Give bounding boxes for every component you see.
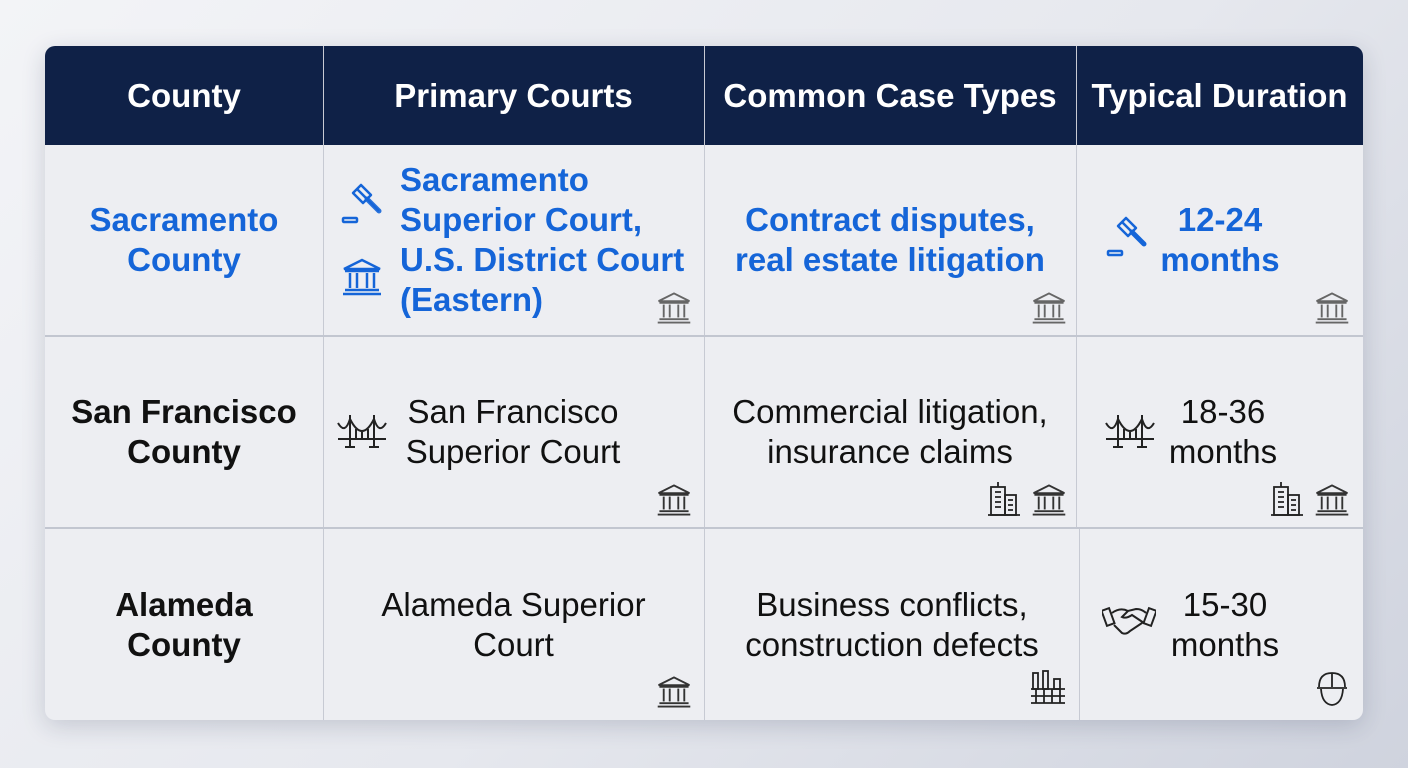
county name xyxy=(115,586,253,663)
county name: County xyxy=(127,433,241,470)
case types xyxy=(735,201,1045,278)
case types: Business conflicts, xyxy=(756,586,1028,622)
case types: Commercial litigation, xyxy=(732,393,1048,430)
duration: months xyxy=(1160,241,1280,278)
case types xyxy=(745,586,1039,662)
county name xyxy=(90,201,278,278)
icon: courthouse blue xyxy=(343,258,381,296)
duration xyxy=(1169,393,1277,470)
icon: handshake xyxy=(1102,606,1156,635)
row 2: San Francisco xyxy=(71,393,1303,516)
courts text: Superior Court xyxy=(406,433,620,470)
courts text xyxy=(406,393,620,470)
case types: insurance claims xyxy=(767,433,1013,470)
header: County: County xyxy=(127,76,241,114)
duration: months xyxy=(1169,433,1277,470)
icon: gavel blue xyxy=(342,184,382,224)
row 3: Alameda xyxy=(115,586,1347,706)
courts text: San Francisco xyxy=(408,393,618,430)
icon: bridge xyxy=(337,415,387,448)
courts text: Superior Court, xyxy=(400,201,642,238)
icon: factory xyxy=(1031,670,1065,704)
courts text xyxy=(381,586,646,662)
duration: 12-24 xyxy=(1178,201,1262,238)
header row xyxy=(45,46,1363,145)
duration xyxy=(1160,201,1280,278)
county name: Alameda xyxy=(115,586,253,622)
county name: San Francisco xyxy=(71,393,297,430)
icons: gray courthouses xyxy=(658,292,1348,708)
duration xyxy=(1171,586,1279,662)
county name: Sacramento xyxy=(90,201,278,238)
courts text: Alameda Superior xyxy=(381,586,646,622)
case types: construction defects xyxy=(745,626,1039,662)
duration: 15-30 xyxy=(1183,586,1267,622)
header: Common Case Types: Common Case Types xyxy=(723,76,1057,114)
courts text: U.S. District Court xyxy=(400,241,684,278)
case types xyxy=(732,393,1048,470)
case types: real estate litigation xyxy=(735,241,1045,278)
courts text: Sacramento xyxy=(400,161,589,198)
icon: buildings xyxy=(988,482,1020,516)
header: Primary Courts: Primary Courts xyxy=(394,76,633,114)
icon: buildings duration xyxy=(1271,482,1303,516)
row 1: Sacramento xyxy=(90,161,1280,318)
duration: 18-36 xyxy=(1181,393,1265,430)
courts text: Court xyxy=(473,626,554,662)
icon: gavel blue duration xyxy=(1106,216,1146,256)
county name xyxy=(71,393,297,470)
icon: bridge duration xyxy=(1105,415,1155,448)
icon: hard hat xyxy=(1317,672,1347,706)
courts text: (Eastern) xyxy=(400,281,543,318)
header: Typical Duration: Typical Duration xyxy=(1091,76,1348,114)
case types: Contract disputes, xyxy=(745,201,1035,238)
duration: months xyxy=(1171,626,1279,662)
county name: County xyxy=(127,241,241,278)
courts text xyxy=(400,161,684,318)
county name: County xyxy=(127,626,241,662)
